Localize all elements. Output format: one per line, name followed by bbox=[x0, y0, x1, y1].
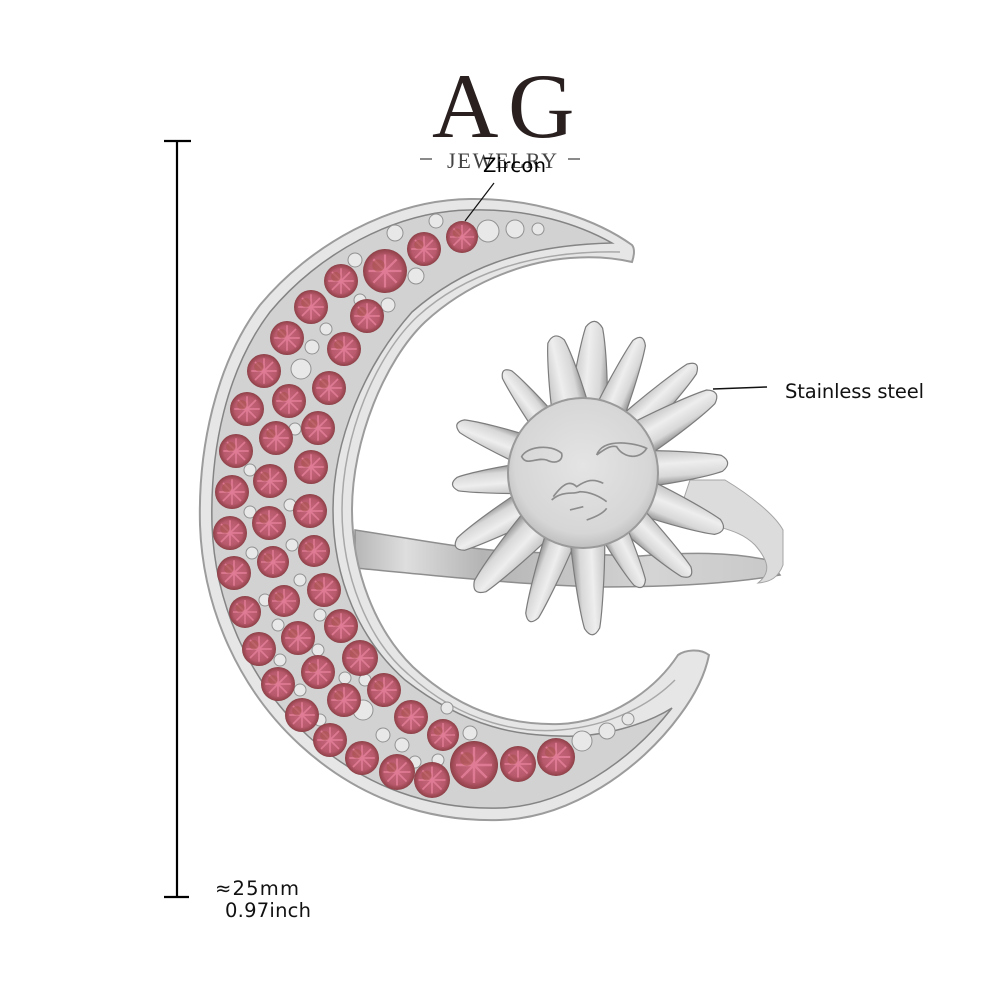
crescent moon bbox=[200, 199, 709, 820]
ring band bbox=[355, 480, 783, 587]
logo: AG Jewelry: A bbox=[432, 55, 498, 157]
logo: AG Jewelry bbox=[420, 55, 580, 173]
moon body bbox=[200, 199, 709, 820]
height measurement scale: 0.97inch bbox=[225, 899, 311, 922]
sun rays bbox=[448, 320, 730, 636]
sun bbox=[448, 320, 730, 636]
pave panel bbox=[212, 210, 672, 808]
callout: Stainless steel: Stainless steel bbox=[785, 380, 924, 403]
callout: Zircon bbox=[465, 154, 546, 221]
sun face bbox=[508, 398, 658, 548]
logo: AG Jewelry: G bbox=[508, 55, 574, 157]
height measurement scale bbox=[164, 141, 311, 922]
logo: AG Jewelry: JEWELRY bbox=[447, 148, 557, 173]
callout: Zircon: Zircon bbox=[483, 154, 546, 177]
zircon gems bbox=[213, 221, 575, 798]
inner rim groove bbox=[342, 252, 675, 731]
silver beads bbox=[244, 214, 634, 768]
height measurement scale: ≈25mm bbox=[215, 877, 299, 900]
